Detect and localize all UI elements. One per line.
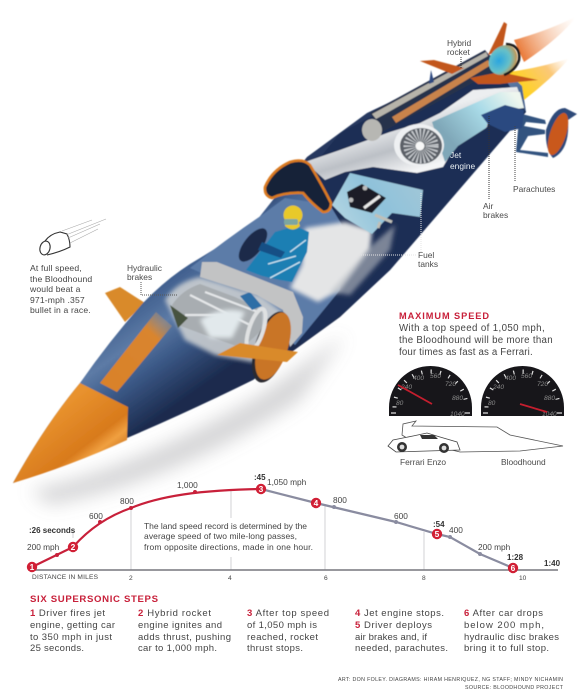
time labels: 1:28 xyxy=(507,553,524,562)
label: Hydraulic brakes: Hydraulic xyxy=(127,263,162,273)
bullet comparison text: 971-mph .357 xyxy=(30,295,85,305)
axis labels: 6 xyxy=(324,575,328,582)
step markers: 2 xyxy=(71,542,76,552)
axis labels: 8 xyxy=(422,575,426,582)
step 1: 1 Driver fires jet xyxy=(30,608,105,619)
rocket nozzle xyxy=(483,39,523,81)
step markers: 4 xyxy=(314,498,319,508)
dark rear fuselage xyxy=(300,55,526,345)
time labels: 1:40 xyxy=(544,559,561,568)
label: Jet engine xyxy=(450,150,475,171)
bullet comparison text: would beat a xyxy=(29,284,81,294)
bullet comparison text xyxy=(29,263,92,315)
maximum speed description xyxy=(399,323,553,358)
chart gridlines xyxy=(73,490,424,570)
land speed record note: The land speed record is determined by the xyxy=(144,521,307,531)
rocket fins xyxy=(420,22,538,84)
heading: maximum speed: MAXIMUM SPEED xyxy=(399,311,489,321)
maximum speed description: With a top speed of 1,050 mph, xyxy=(399,323,545,334)
rear upper tail fin xyxy=(429,70,434,84)
bullet comparison text: bullet in a race. xyxy=(30,305,91,315)
speed labels: 800 xyxy=(120,496,134,506)
jet engine casing xyxy=(432,92,524,162)
illustration: Bloodhound supersonic car cutaway xyxy=(13,16,577,505)
acceleration line xyxy=(32,489,261,567)
label: Hydraulic brakes xyxy=(127,263,178,295)
label: Hydraulic brakes: brakes xyxy=(127,272,152,282)
orange nose stripe xyxy=(100,312,172,392)
axis labels: DISTANCE IN MILES xyxy=(32,574,99,581)
steps xyxy=(30,608,559,654)
intake duct silver xyxy=(305,87,522,180)
axis labels: 4 xyxy=(228,575,232,582)
label: Air brakes: brakes xyxy=(483,210,508,220)
step 2: car to 1,000 mph. xyxy=(138,643,217,654)
gauge: Bloodhound: 400 xyxy=(505,375,516,382)
left fin xyxy=(105,287,145,322)
step 1: engine, getting car xyxy=(30,620,115,631)
seat fade xyxy=(330,225,395,295)
wheel well xyxy=(165,277,286,362)
step 6: bring it to full stop. xyxy=(464,643,549,654)
step 3: of 1,050 mph is xyxy=(247,620,317,631)
cockpit well xyxy=(190,198,345,345)
flames xyxy=(505,16,577,100)
gauge caption: Ferrari Enzo: Ferrari Enzo xyxy=(400,457,446,467)
step 3: 3 After top speed xyxy=(247,608,329,619)
speed labels: 600 xyxy=(394,511,408,521)
step markers: 6 xyxy=(511,563,516,573)
speed labels: 200 mph xyxy=(478,542,511,552)
bullet comparison text: At full speed, xyxy=(30,263,82,273)
orange air intake xyxy=(265,161,331,212)
silhouette: Bloodhound xyxy=(402,421,563,452)
rear tail wheel assembly xyxy=(516,108,577,158)
step 3: reached, rocket xyxy=(247,632,318,643)
distance axis xyxy=(33,569,558,571)
steps 4 and 5: needed, parachutes. xyxy=(355,643,448,654)
step 6: 6 After car drops xyxy=(464,608,543,619)
speed labels: 400 xyxy=(449,525,463,535)
gauge: Bloodhound: 1040 xyxy=(542,411,557,418)
dashboard shadow xyxy=(234,224,272,266)
jet engine fan xyxy=(394,124,444,166)
front wheel xyxy=(243,307,298,387)
label: Hybrid rocket xyxy=(447,38,472,68)
chart: speed over distance xyxy=(27,473,561,582)
gauge: Ferrari Enzo: 240 xyxy=(400,384,412,391)
axis labels xyxy=(32,574,527,582)
land speed record note: average speed of two mile-long passes, xyxy=(144,531,297,541)
step markers: 5 xyxy=(435,529,440,539)
step 1 xyxy=(30,608,115,654)
label: Parachutes xyxy=(513,126,555,194)
grey bulkhead xyxy=(200,262,303,347)
step 2: 2 Hybrid rocket xyxy=(138,608,211,619)
step 2: adds thrust, pushing xyxy=(138,632,231,643)
speed markers xyxy=(55,490,482,557)
gauge: Ferrari Enzo: 880 xyxy=(452,395,463,402)
gauge: Ferrari Enzo: 80 xyxy=(396,400,404,407)
step 3: thrust stops. xyxy=(247,643,303,654)
label: Air brakes xyxy=(483,116,508,220)
step markers: 1 xyxy=(30,562,35,572)
engine bay dark panel xyxy=(347,184,386,213)
suspension and brakes xyxy=(170,284,262,348)
panel: maximum speed xyxy=(388,311,564,467)
credits xyxy=(338,677,564,691)
label: Hybrid rocket: Hybrid xyxy=(447,38,472,48)
maximum speed description: four times as fast as a Ferrari. xyxy=(399,347,533,358)
label: Air brakes: Air xyxy=(483,201,493,211)
gauge: Ferrari Enzo: 1040 xyxy=(450,411,465,418)
orange nose cone xyxy=(13,383,128,483)
icon: speeding bullet xyxy=(38,219,106,256)
steps 4 and 5: 4 Jet engine stops. xyxy=(355,608,444,619)
time labels xyxy=(29,473,561,568)
gauge caption: Bloodhound: Bloodhound xyxy=(501,457,546,467)
silhouette: Ferrari Enzo xyxy=(388,433,460,453)
gauge: Bloodhound: 880 xyxy=(544,395,555,402)
axis labels: 2 xyxy=(129,575,133,582)
land speed record note xyxy=(144,521,313,552)
step markers: 3 xyxy=(259,484,264,494)
air brake panel xyxy=(481,105,524,132)
time labels: :54 xyxy=(433,520,445,529)
right fin xyxy=(217,343,298,362)
gauge: Ferrari Enzo: 720 xyxy=(445,381,456,388)
label: Jet engine: engine xyxy=(450,161,475,171)
step 3 xyxy=(247,608,329,654)
time labels: :26 seconds xyxy=(29,526,76,535)
steps 4 and 5: air brakes and, if xyxy=(355,632,427,643)
step 6: hydraulic disc brakes xyxy=(464,632,559,643)
steps 4 and 5: 5 Driver deploys xyxy=(355,620,432,631)
axis labels: 10 xyxy=(519,575,527,582)
label: Fuel tanks xyxy=(359,193,438,269)
gauge: Bloodhound xyxy=(481,366,564,418)
speed labels: 1,050 mph xyxy=(267,477,307,487)
speed labels: 600 xyxy=(89,511,103,521)
credits: SOURCE: BLOODHOUND PROJECT xyxy=(465,685,564,691)
steps 4 and 5 xyxy=(355,608,448,654)
speed labels: 200 mph xyxy=(27,542,60,552)
car body xyxy=(13,55,526,483)
label: Fuel tanks: tanks xyxy=(418,259,438,269)
speed labels: 1,000 xyxy=(177,480,198,490)
speed labels xyxy=(27,477,511,552)
car shadow xyxy=(30,335,345,505)
gauge: Bloodhound: 80 xyxy=(488,400,496,407)
step 2: engine ignites and xyxy=(138,620,222,631)
hybrid rocket tube xyxy=(362,50,500,141)
step 1: to 350 mph in just xyxy=(30,632,112,643)
deceleration line xyxy=(261,489,513,568)
step markers xyxy=(27,484,518,573)
fuel tanks xyxy=(332,173,423,234)
label: Jet engine: Jet xyxy=(450,150,462,160)
gauge: Bloodhound: 720 xyxy=(537,381,548,388)
engine components xyxy=(349,186,392,228)
maximum speed description: the Bloodhound will be more than xyxy=(399,335,553,346)
heading: six supersonic steps: SIX SUPERSONIC STEPS xyxy=(30,594,159,605)
credits: ART: DON FOLEY. DIAGRAMS: HIRAM HENRIQUEZ, NG STAFF; MINDY NICHAMIN xyxy=(338,677,563,683)
driver xyxy=(246,206,309,282)
gauge: Bloodhound: 240 xyxy=(492,384,504,391)
time labels: :45 xyxy=(254,473,266,482)
step 6 xyxy=(464,608,559,654)
step 1: 25 seconds. xyxy=(30,643,84,654)
seat xyxy=(290,222,372,302)
gauge: Bloodhound: 560 xyxy=(521,373,532,380)
gauge: Ferrari Enzo: 560 xyxy=(430,373,441,380)
gauge: Ferrari Enzo: 400 xyxy=(413,375,424,382)
bullet comparison text: the Bloodhound xyxy=(30,274,92,284)
speed labels: 800 xyxy=(333,495,347,505)
step 6: below 200 mph, xyxy=(464,620,544,631)
label: Parachutes: Parachutes xyxy=(513,184,555,194)
label: Hybrid rocket: rocket xyxy=(447,47,470,57)
step 2 xyxy=(138,608,231,654)
label: Fuel tanks: Fuel xyxy=(418,250,434,260)
gauge: Ferrari Enzo xyxy=(389,366,472,418)
land speed record note: from opposite directions, made in one hour. xyxy=(144,542,313,552)
